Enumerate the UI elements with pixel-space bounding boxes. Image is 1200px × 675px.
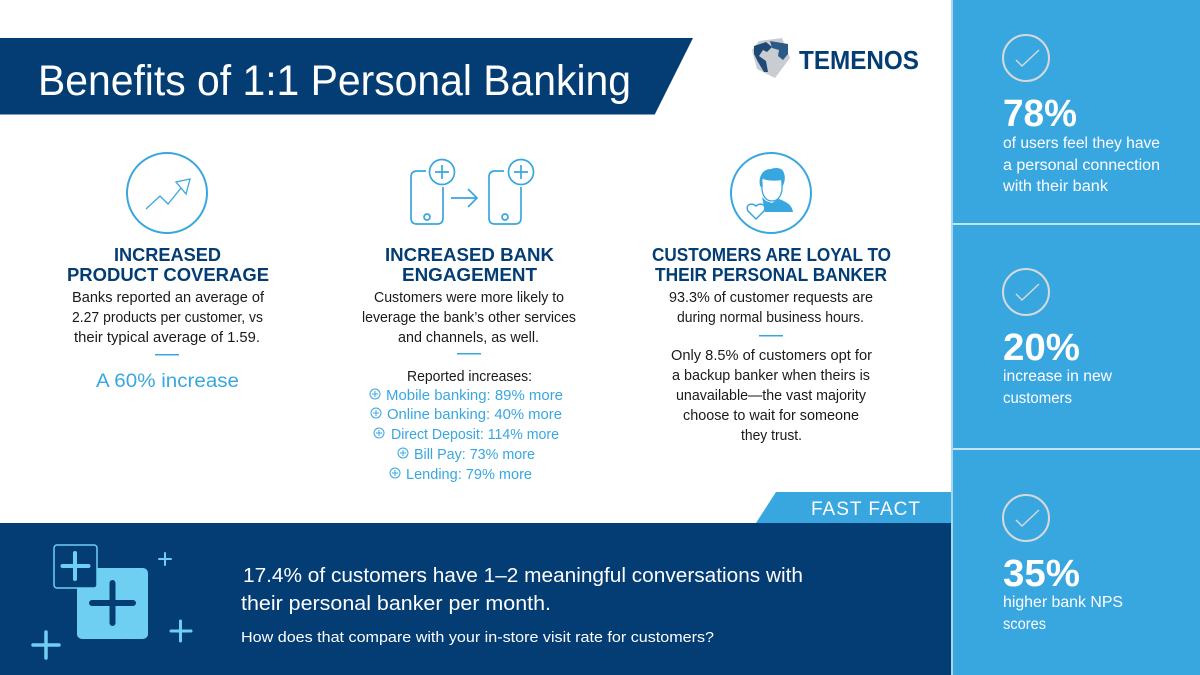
body text: their typical average of 1.59. xyxy=(74,330,260,346)
body text: leverage the bank’s other services xyxy=(362,310,576,326)
panel: customers are loyal xyxy=(652,153,891,444)
heading: CUSTOMERS ARE LOYAL TO xyxy=(652,245,891,265)
list of reported increases: Bill Pay: 73% more xyxy=(414,446,535,463)
stat: 78% xyxy=(1002,35,1160,195)
body text: Banks reported an average of xyxy=(72,290,265,306)
heading: PRODUCT COVERAGE xyxy=(67,265,269,285)
heading xyxy=(652,245,891,285)
icon: check circle xyxy=(1003,35,1049,81)
heading xyxy=(385,245,554,285)
icon: rising arrow chart xyxy=(127,153,207,233)
heading: THEIR PERSONAL BANKER xyxy=(655,265,887,285)
icon: check circle xyxy=(1003,495,1049,541)
icon: person with heart xyxy=(731,153,811,233)
body text xyxy=(362,290,576,346)
icon: globe cube xyxy=(752,38,790,78)
body text: 93.3% of customer requests are xyxy=(669,290,873,306)
fast fact tab xyxy=(756,492,951,523)
title banner xyxy=(0,38,693,115)
stat: 78%: of users feel they have xyxy=(1003,135,1160,152)
list of reported increases: Online banking: 40% more xyxy=(387,406,562,423)
list of reported increases xyxy=(370,387,563,483)
list of reported increases: Lending: 79% more xyxy=(406,466,532,483)
stat: 35%: scores xyxy=(1003,616,1046,633)
heading: ENGAGEMENT xyxy=(402,265,537,285)
stat: 20%: 20% xyxy=(1003,327,1080,369)
callout: 60% increase: A 60% increase xyxy=(96,371,239,392)
body text: Only 8.5% of customers opt for xyxy=(671,348,872,364)
body text: and channels, as well. xyxy=(398,330,539,346)
body text: choose to wait for someone xyxy=(683,408,859,424)
heading xyxy=(67,245,269,285)
body text: unavailable—the vast majority xyxy=(676,388,867,404)
logo: Temenos: TEMENOS xyxy=(799,45,919,75)
fast fact text xyxy=(241,564,803,646)
body text: 2.27 products per customer, vs xyxy=(72,310,263,326)
heading: INCREASED xyxy=(114,245,221,265)
body text: Customers were more likely to xyxy=(374,290,564,306)
logo: Temenos xyxy=(752,38,919,78)
fast fact text: How does that compare with your in-store visit rate for customers? xyxy=(241,629,714,646)
panel: statistics sidebar xyxy=(951,0,1200,675)
panel: fast fact xyxy=(0,492,951,675)
stat: 20% xyxy=(1003,269,1113,407)
heading: INCREASED BANK xyxy=(385,245,554,265)
body text: a backup banker when theirs is xyxy=(672,368,870,384)
body text xyxy=(72,290,265,346)
title: Benefits of 1:1 Personal Banking xyxy=(38,57,631,105)
stat: 78%: 78% xyxy=(1003,93,1077,135)
body text: they trust. xyxy=(741,428,802,444)
icon: plus squares xyxy=(33,545,191,658)
icon: check circle xyxy=(1003,269,1049,315)
body text: during normal business hours. xyxy=(677,310,864,326)
fast fact text: 17.4% of customers have 1–2 meaningful conversations with xyxy=(243,564,803,587)
reported increases label: Reported increases: xyxy=(407,369,532,385)
stat: 35%: 35% xyxy=(1003,553,1080,595)
body text xyxy=(669,290,873,444)
panel: increased bank engagement xyxy=(362,160,576,483)
stat: 78%: with their bank xyxy=(1002,178,1108,195)
stat: 20%: increase in new xyxy=(1003,368,1113,385)
icon: phones with plus badges and arrow xyxy=(411,160,534,224)
fast fact tab: FAST FACT xyxy=(811,499,920,520)
stat: 20%: customers xyxy=(1003,390,1072,407)
fast fact text: their personal banker per month. xyxy=(241,592,551,615)
list of reported increases: Direct Deposit: 114% more xyxy=(391,426,559,443)
panel: increased product coverage xyxy=(67,153,269,392)
stat: 35% xyxy=(1003,495,1123,633)
stat: 78%: a personal connection xyxy=(1003,157,1160,174)
list of reported increases: Mobile banking: 89% more xyxy=(386,387,563,404)
stat: 35%: higher bank NPS xyxy=(1003,594,1123,611)
